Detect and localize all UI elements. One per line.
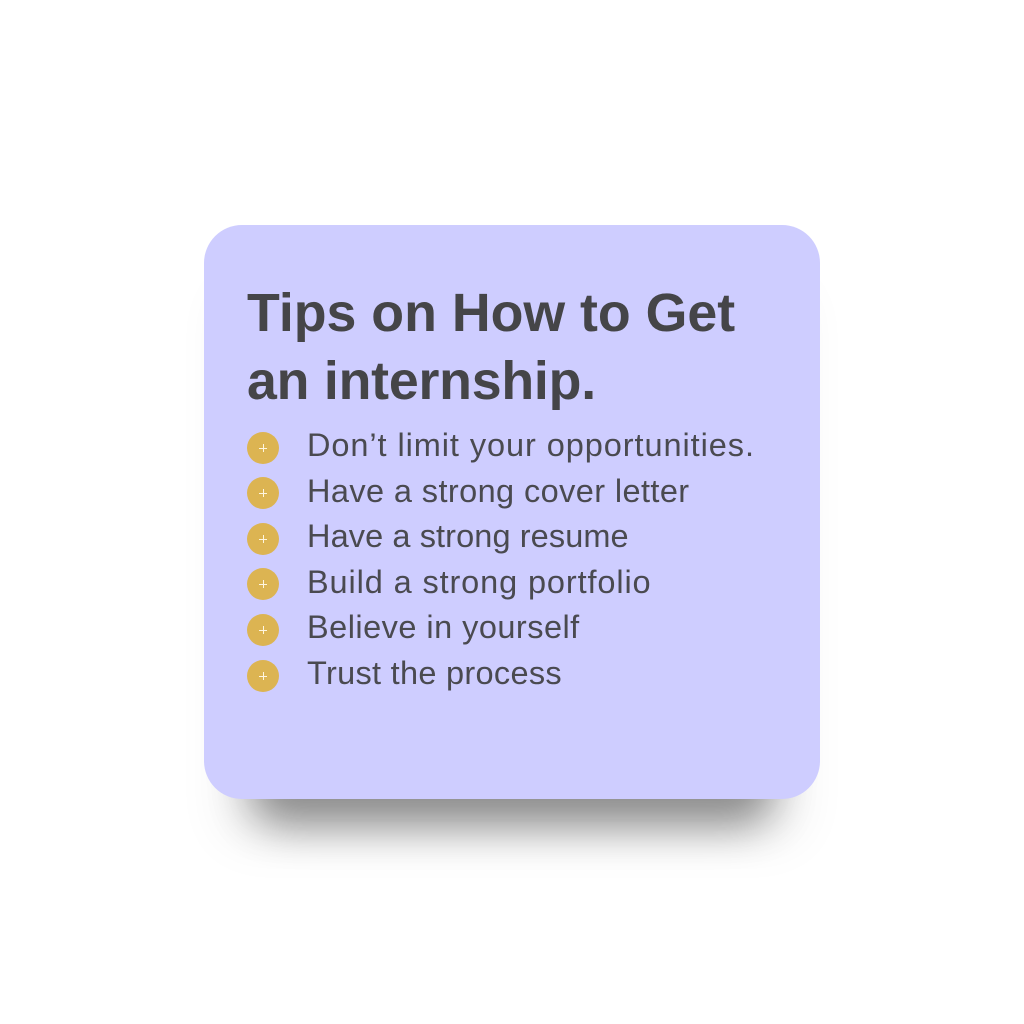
- list item: resume: Have a strong resume: [307, 518, 629, 554]
- title: Tips on How to Get: [247, 283, 735, 343]
- title: [247, 283, 735, 411]
- card shadow: [214, 280, 810, 850]
- panel: tips card: [204, 225, 820, 799]
- list item: cover letter: Have a strong cover letter: [307, 473, 690, 509]
- title: an internship.: [247, 351, 596, 411]
- card bottom shadow: [250, 720, 774, 826]
- list item: believe: Believe in yourself: [307, 609, 580, 645]
- list item: trust: Trust the process: [307, 655, 562, 691]
- list item: opportunities: Don’t limit your opportunities.: [307, 427, 755, 463]
- list item: portfolio: Build a strong portfolio: [307, 564, 652, 600]
